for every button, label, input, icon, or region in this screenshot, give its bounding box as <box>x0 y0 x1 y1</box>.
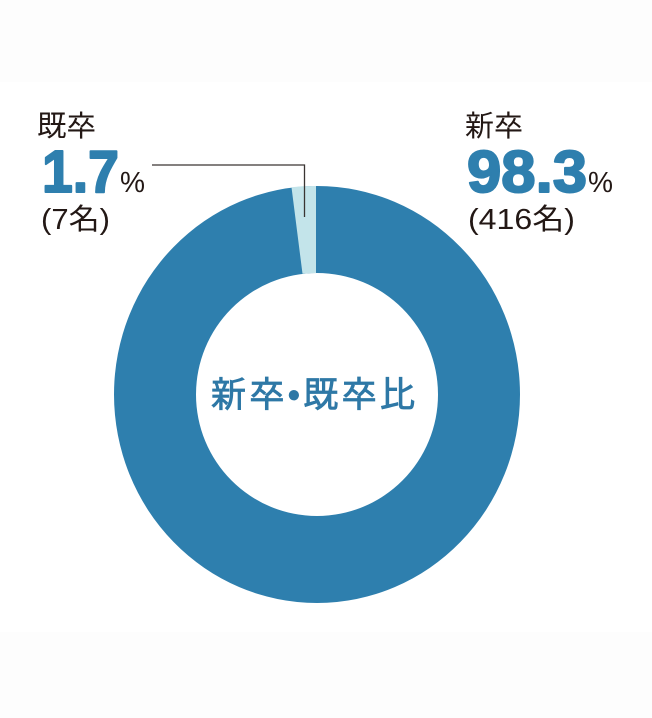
count: 416名: (416名) <box>468 203 575 236</box>
center label: 新卒•既卒比 <box>211 376 415 415</box>
count: 7名: (7名) <box>41 203 110 236</box>
segment: experienced hires 1.7% <box>292 186 316 274</box>
value: 98.3%: 98.3 <box>467 139 587 205</box>
heading: 新卒: 新卒 <box>465 111 523 143</box>
leader line <box>152 165 304 217</box>
segment: new graduates 98.3% <box>114 186 520 603</box>
percent sign: % <box>588 167 613 199</box>
donut chart <box>114 186 520 603</box>
label: experienced hires <box>37 111 145 236</box>
heading: 既卒: 既卒 <box>37 111 96 143</box>
label: new graduates <box>465 111 613 236</box>
percent sign: % <box>120 167 145 199</box>
value: 1.7%: 1.7 <box>42 139 119 205</box>
